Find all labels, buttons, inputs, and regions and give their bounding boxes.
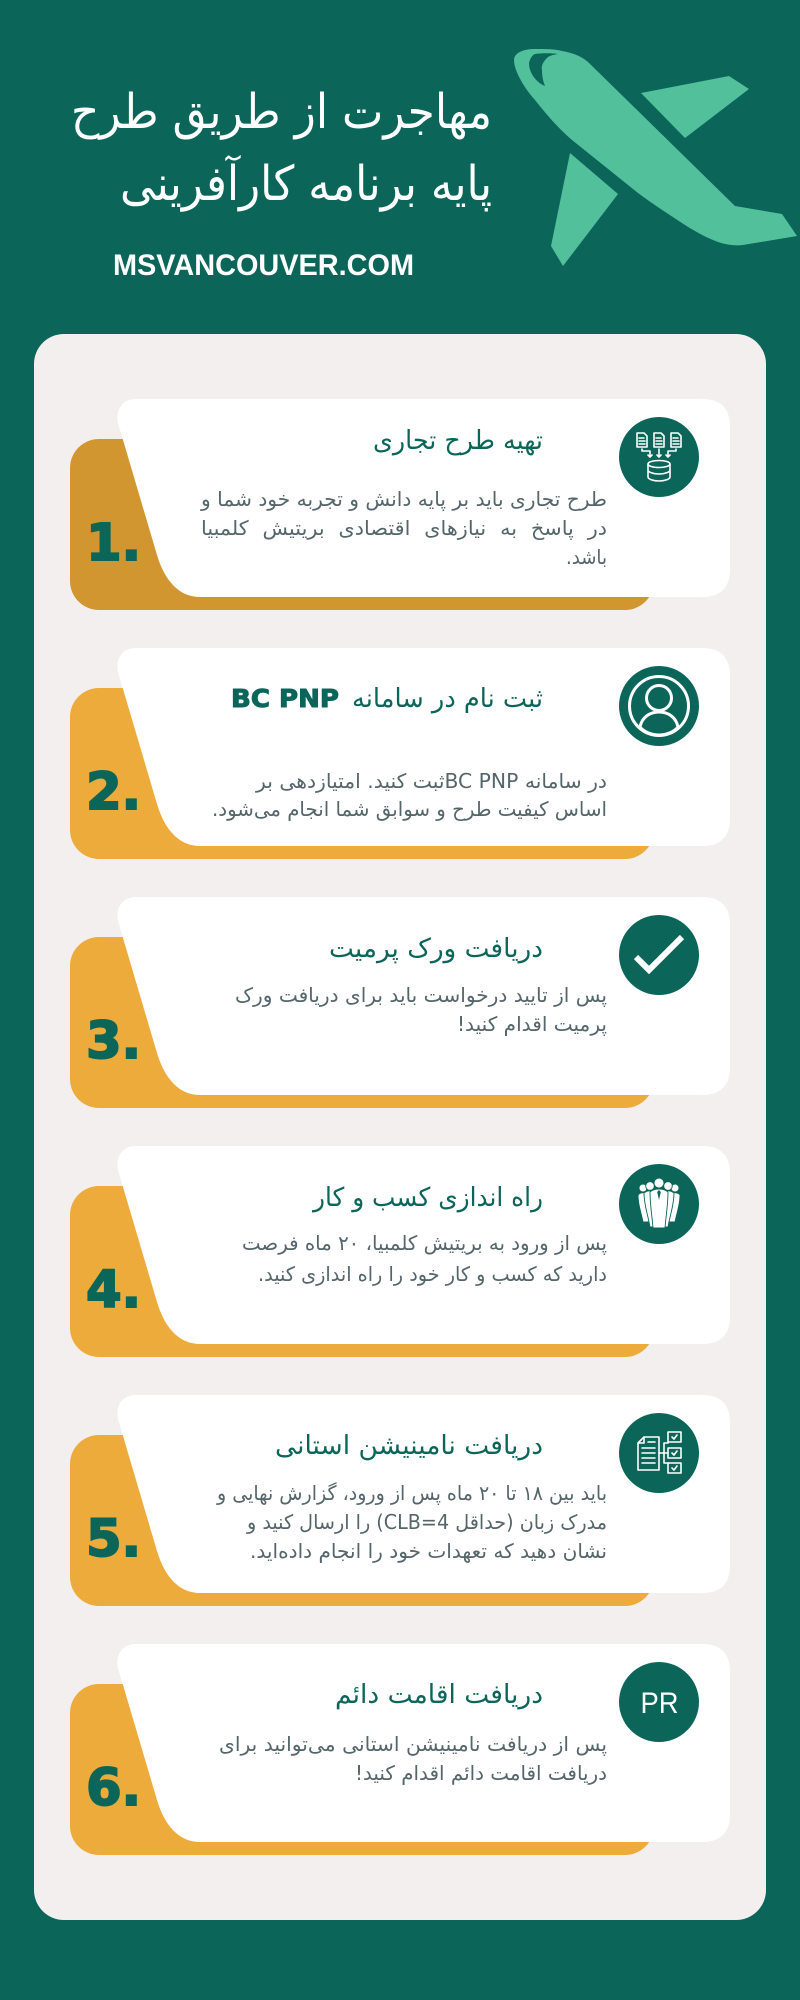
icon: group of people	[619, 1164, 699, 1244]
icon: document checklist	[619, 1413, 699, 1493]
step 5 body: مدرک زبان (حداقل CLB=4) را ارسال کنید و	[246, 1510, 607, 1534]
step 1 body	[200, 487, 607, 569]
step 2 card	[70, 648, 730, 859]
step 6 orange backing	[70, 1684, 654, 1855]
step 5 body	[216, 1481, 607, 1563]
step 2 body: اساس کیفیت طرح و سوابق شما انجام می‌شود.	[212, 797, 607, 821]
step 4 body	[242, 1231, 607, 1286]
step 1 body: باشد.	[566, 545, 607, 569]
step 4 body: پس از ورود به بریتیش کلمبیا، ۲۰ ماه فرصت	[242, 1231, 607, 1256]
step 2 white card	[117, 648, 730, 846]
step 1 body: طرح تجاری باید بر پایه دانش و تجربه خود شما و	[200, 487, 607, 512]
step 4 number: 4.	[86, 1261, 141, 1320]
step 4 orange backing	[70, 1186, 654, 1357]
step 5 body: باید بین ۱۸ تا ۲۰ ماه پس از ورود، گزارش نهایی و	[216, 1481, 607, 1506]
step 3 number: 3.	[86, 1012, 141, 1071]
step 2 body	[212, 769, 607, 821]
panel: steps background	[34, 334, 766, 1920]
step 5 heading: دریافت نامینیشن استانی	[275, 1431, 543, 1461]
step 2 heading: BC PNP	[231, 684, 339, 713]
step 1 number: 1.	[86, 514, 141, 573]
step 4 heading: راه اندازی کسب و کار	[311, 1183, 543, 1213]
step 1 heading: تهیه طرح تجاری	[373, 426, 543, 456]
title: مهاجرت از طریق طرح	[71, 84, 492, 140]
icon: PR badge: PR	[640, 1687, 678, 1720]
step 1 body: در پاسخ به نیازهای اقتصادی بریتیش کلمبیا	[201, 516, 607, 541]
icon: check mark	[619, 915, 699, 995]
title: پایه برنامه کارآفرینی	[120, 154, 492, 212]
step 2 body: در سامانه BC PNPثبت کنید. امتیازدهی بر	[255, 769, 607, 793]
icon: PR badge	[619, 1662, 699, 1742]
step 5 white card	[117, 1395, 730, 1593]
step 3 body	[235, 983, 607, 1037]
step 6 heading: دریافت اقامت دائم	[335, 1680, 543, 1710]
step 5 card	[70, 1395, 730, 1606]
step 6 card	[70, 1644, 730, 1855]
title	[71, 84, 492, 212]
step 3 white card	[117, 897, 730, 1095]
step 3 body: پرمیت اقدام کنید!	[457, 1012, 607, 1037]
step 3 orange backing	[70, 937, 654, 1108]
step 6 body: پس از دریافت نامینیشن استانی می‌توانید برای	[219, 1732, 607, 1757]
step 6 number: 6.	[86, 1759, 141, 1818]
step 5 orange backing	[70, 1435, 654, 1606]
step 2 orange backing	[70, 688, 654, 859]
step 1 orange backing	[70, 439, 654, 610]
step 1 card	[70, 399, 730, 610]
step 2 heading: ثبت نام در سامانه	[352, 684, 543, 714]
step 6 body	[219, 1732, 607, 1785]
step 1 white card	[117, 399, 730, 597]
step 4 white card	[117, 1146, 730, 1344]
step 6 body: دریافت اقامت دائم اقدام کنید!	[355, 1761, 607, 1785]
step 3 heading: دریافت ورک پرمیت	[329, 934, 543, 964]
icon: user profile	[619, 666, 699, 746]
step 2 heading	[231, 684, 543, 714]
icon: documents into database	[619, 417, 699, 497]
step 3 body: پس از تایید درخواست باید برای دریافت ورک	[235, 983, 607, 1008]
step 4 body: دارید که کسب و کار خود را راه اندازی کنید.	[258, 1262, 607, 1286]
icon: airplane	[514, 49, 797, 266]
step 5 number: 5.	[86, 1510, 141, 1569]
step 3 card	[70, 897, 730, 1108]
step 6 white card	[117, 1644, 730, 1842]
step 2 number: 2.	[86, 763, 141, 822]
step 4 card	[70, 1146, 730, 1357]
website text: MSVANCOUVER.COM	[113, 249, 414, 282]
step 5 body: نشان دهید که تعهدات خود را انجام داده‌اید.	[250, 1539, 607, 1563]
